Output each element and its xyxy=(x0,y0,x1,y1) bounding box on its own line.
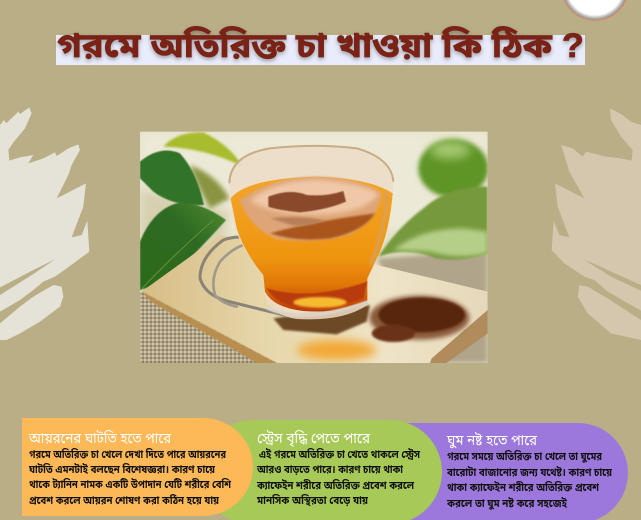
body: গরমে সময়ে অতিরিক্ত চা খেলে তা ঘুমের xyxy=(447,450,602,463)
body: থাকা ক্যাফেইন শরীরে অতিরিক্ত প্রবেশ xyxy=(447,481,599,494)
body: গরমে অতিরিক্ত চা খেলে দেখা দিতে পারে আয়রনের xyxy=(29,448,226,461)
decorative circle badge xyxy=(561,0,629,21)
panel: sleep text xyxy=(446,432,612,510)
leaves xyxy=(140,132,488,290)
wooden board xyxy=(142,235,488,363)
body xyxy=(28,448,231,507)
heading: স্ট্রেস বৃদ্ধি পেতে পারে xyxy=(257,430,371,447)
body: মানসিক অস্থিরতা বেড়ে যায় xyxy=(256,494,368,507)
panel: iron background xyxy=(22,418,253,516)
body xyxy=(256,448,421,507)
body xyxy=(446,450,612,510)
handle xyxy=(200,237,287,316)
body: বারোটা বাজানোর জন্য যথেষ্ট। কারণ চায়ে xyxy=(446,466,612,479)
floating tea leaves xyxy=(268,191,346,212)
panel: stress background xyxy=(200,420,442,520)
body: আরও বাড়তে পারে। কারণ চায়ে থাকা xyxy=(256,464,404,476)
body: ঘাটতি এমনটাই বলছেন বিশেষজ্ঞরা। কারণ চায়ে xyxy=(28,463,215,476)
panel: stress (green, behind) and sleep (purple) xyxy=(22,418,628,520)
panel: sleep background xyxy=(330,423,628,520)
body: এই গরমে অতিরিক্ত চা খেতে থাকলে স্ট্রেস xyxy=(259,448,421,461)
left brush stroke xyxy=(0,107,89,340)
photo: cup of tea on wooden board xyxy=(140,132,488,363)
photo background xyxy=(140,132,488,363)
body: প্রবেশ করলে আয়রন শোষণ করা কঠিন হয়ে যায় xyxy=(29,494,219,507)
body: থাকে ট্যানিন নামক একটি উপাদান যেটি শরীরে বেশি xyxy=(29,478,231,491)
body: করলে তা ঘুম নষ্ট করে সহজেই xyxy=(446,497,568,510)
cup xyxy=(229,146,393,319)
body: ক্যাফেইন শরীরে অতিরিক্ত প্রবেশ করলে xyxy=(256,479,415,492)
title xyxy=(56,25,585,65)
heading: ঘুম নষ্ট হতে পারে xyxy=(446,432,538,449)
panel: stress text xyxy=(256,430,421,507)
title text: গরমে অতিরিক্ত চা খাওয়া কি ঠিক ? xyxy=(57,25,584,65)
panel: iron deficiency text xyxy=(28,430,231,507)
rooibos pile xyxy=(369,296,469,342)
heading: আয়রনের ঘাটতি হতে পারে xyxy=(28,430,172,446)
title highlight xyxy=(56,35,585,65)
right brush stroke xyxy=(552,108,641,340)
